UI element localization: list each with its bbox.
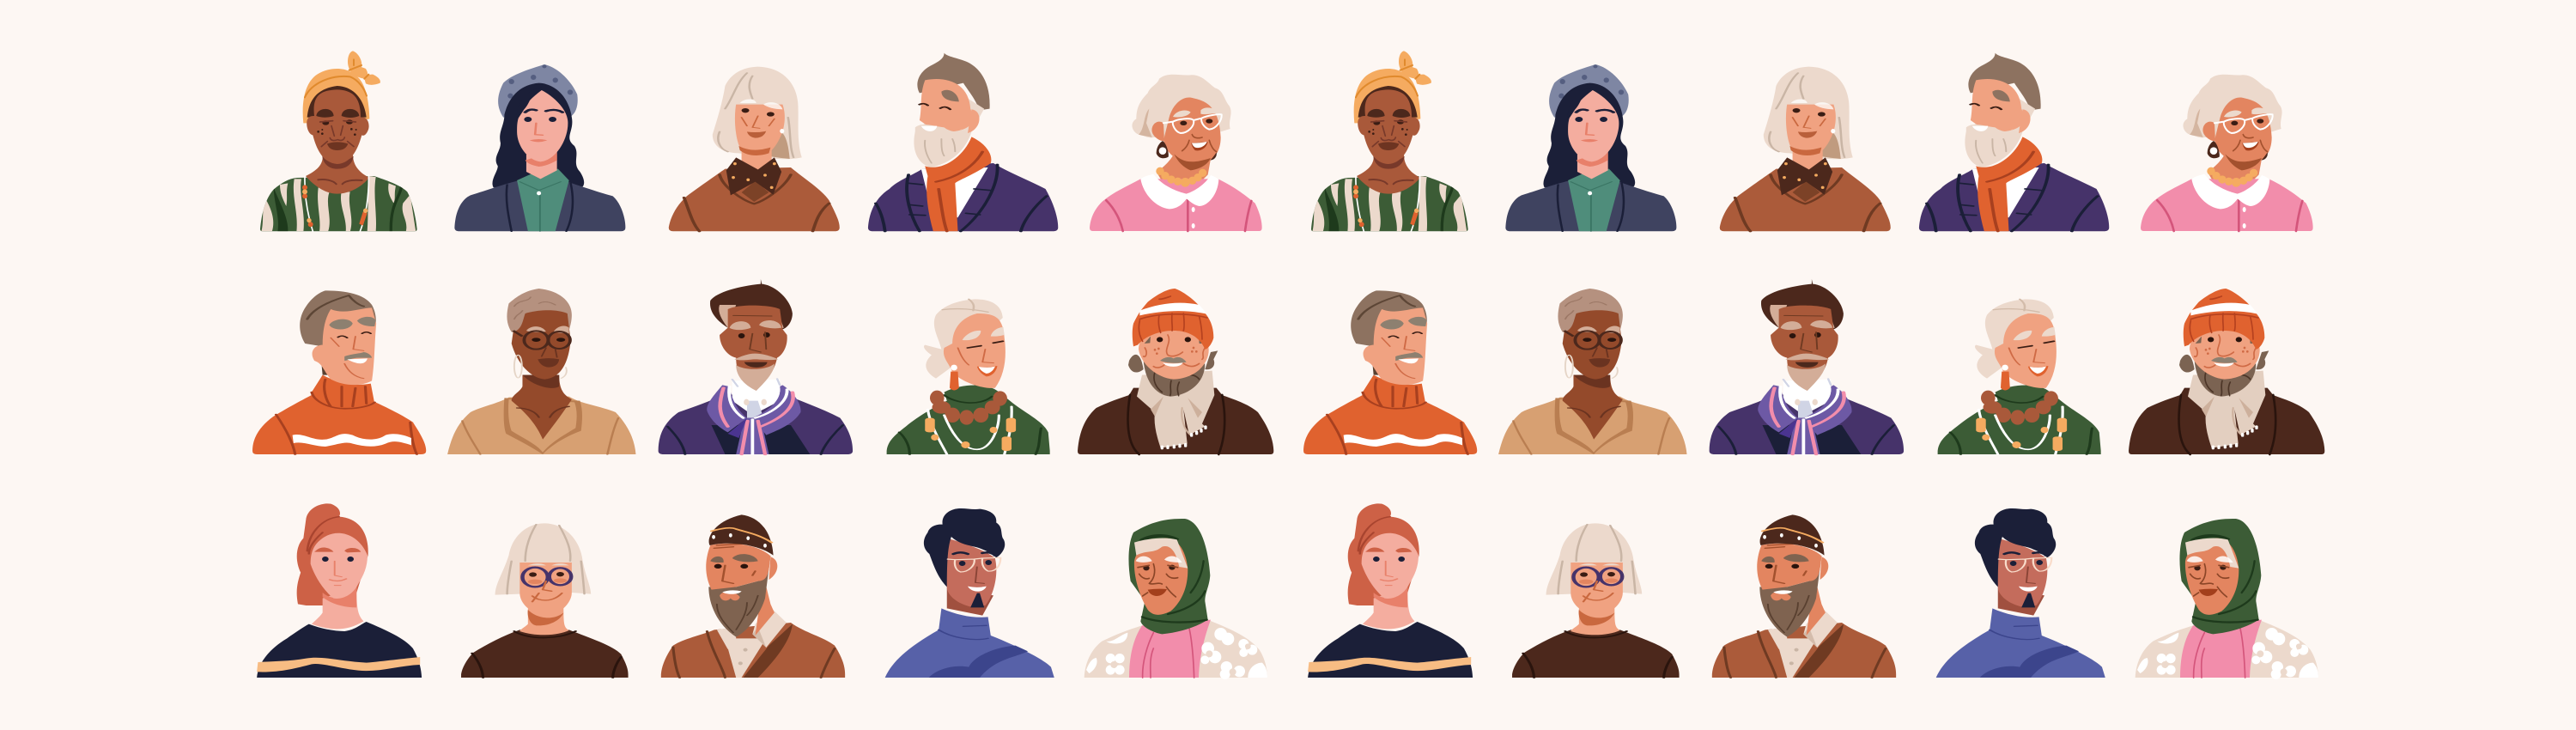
copy: woman with round glasses and tan jacket [1498,289,1686,454]
copy: woman with white bob [1720,67,1891,231]
portrait: red haired woman with navy striped sweater [257,503,422,678]
portrait: woman with white fringe, purple glasses and brown sweater [461,523,629,678]
copy: bearded man with cap [1712,514,1896,678]
portrait: woman with yellow headscarf and striped top [260,51,417,232]
portrait: man with moustache and orange sweater [252,290,426,454]
portrait: older woman with white glasses and pink blouse [1090,75,1262,231]
copy: red haired woman [1308,503,1473,678]
portrait: man with beret, grey moustache and striped scarf [659,279,853,454]
portrait: bearded man in orange beanie and cream scarf [1078,289,1273,454]
portrait: bearded man with embroidered cap and brown cardigan [661,514,845,678]
portrait: older woman with white bun, orange earring, green sweater and beads [887,299,1050,454]
copy: woman in green headscarf [2136,519,2318,679]
copy: woman with purple glasses [1512,523,1680,678]
copy: man with blue turtleneck [1936,508,2105,678]
portrait: dark skinned woman with round glasses and tan jacket [447,289,635,454]
portrait: woman with white bob and brown sweater [669,67,840,231]
copy: bearded man with orange scarf [1919,53,2109,231]
portrait: man with dark curly hair, goatee and blue turtleneck [885,508,1054,678]
portrait: older woman in green headscarf with flower cardigan [1084,519,1267,679]
portrait: dark haired woman with blue beret and jacket [454,64,625,231]
copy: woman with blue beret [1505,64,1676,231]
copy: woman with green sweater and beads [1938,299,2101,454]
copy: woman with yellow headscarf [1311,51,1468,232]
avatar grid illustration [252,51,2325,679]
copy: man in orange beanie [2129,289,2324,454]
portrait: bearded man with orange scarf and purple jacket [868,53,1058,231]
copy: man with moustache and orange sweater [1303,290,1477,454]
copy: man with beret and striped scarf [1710,279,1904,454]
copy: woman with white glasses and pink blouse [2141,75,2313,231]
